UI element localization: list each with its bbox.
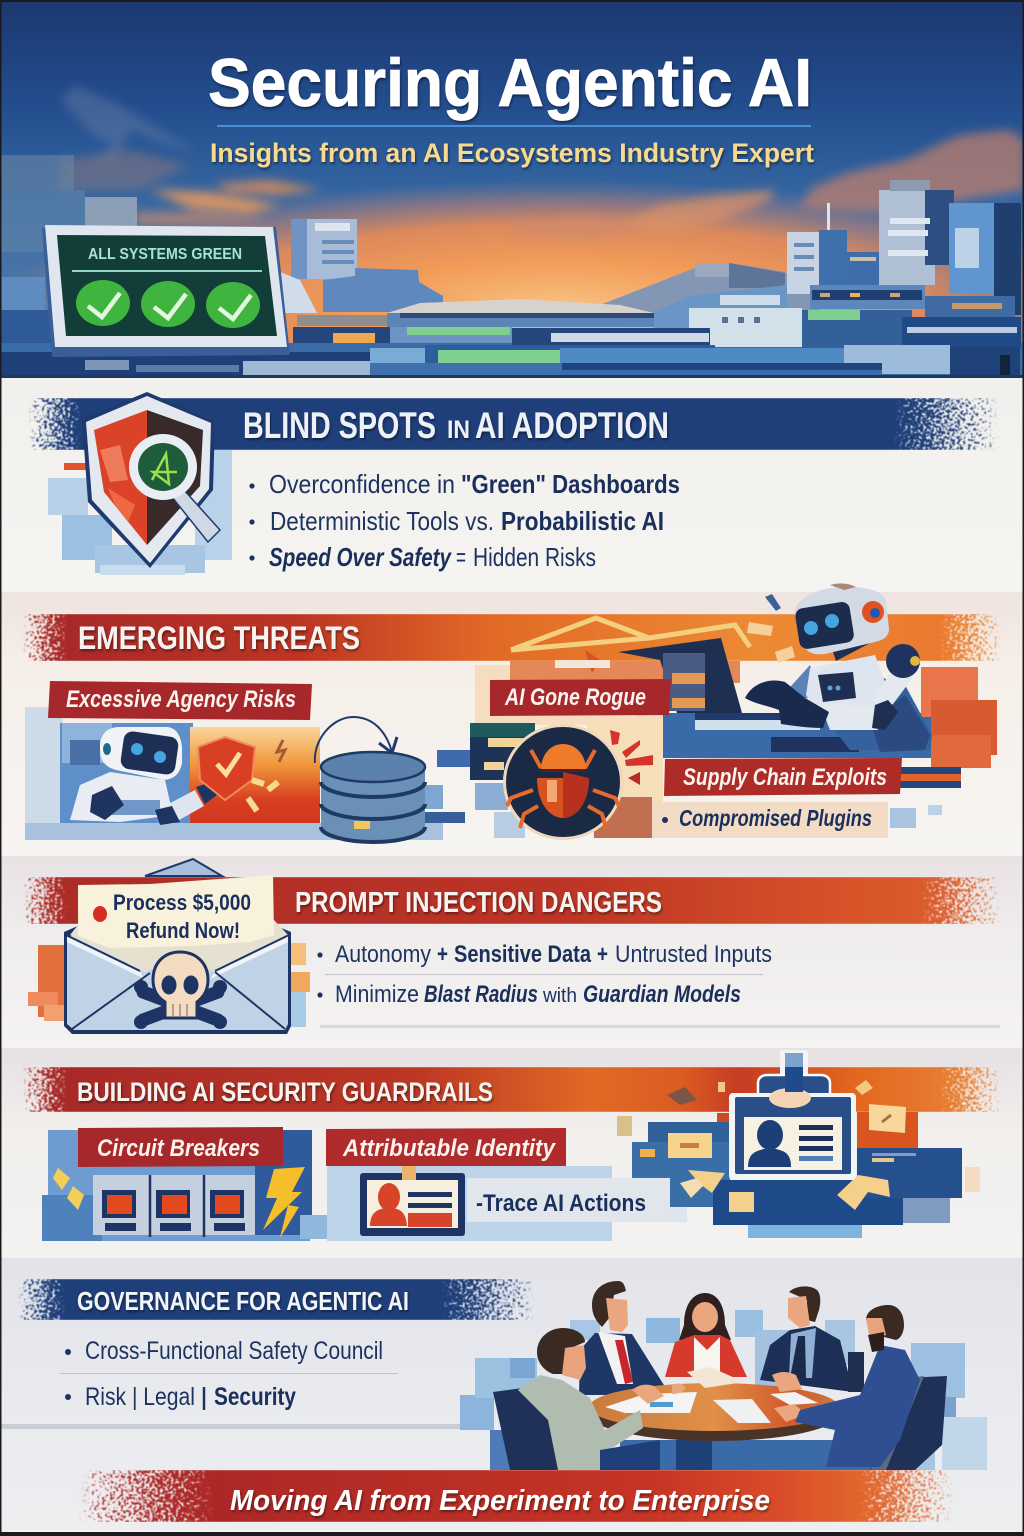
distant faded buildings [0, 155, 137, 355]
text: trace AI actions: -Trace AI Actions [476, 1190, 646, 1217]
man with red tie [579, 1281, 667, 1395]
blue mosaic backdrop [460, 1310, 987, 1470]
papers and book [605, 1367, 818, 1423]
bullet list: Untrusted Inputs [615, 941, 772, 968]
foreground city band [0, 285, 1024, 378]
label: attributable identity: Attributable Identity [342, 1135, 557, 1162]
bullet list [249, 469, 680, 572]
small shield [198, 737, 285, 811]
panel: building AI security guardrails [20, 1050, 1005, 1241]
illustration: robot at rogue workstation [511, 583, 932, 752]
hero panel: city skyline at sunset [0, 0, 1024, 430]
icon: skull and crossbones [134, 952, 227, 1029]
banner [20, 614, 1005, 661]
callout: compromised plugins [652, 802, 888, 838]
bullet list: Hidden Risks [473, 542, 596, 572]
heading: BLIND SPOTS [243, 405, 436, 446]
robot hands [745, 681, 829, 728]
icon: circuit breaker panel [53, 1167, 305, 1238]
bullet list: = [456, 542, 466, 572]
curved arrow [315, 717, 397, 763]
subtitle: Insights from an AI Ecosystems Industry Expert [210, 138, 814, 168]
panel: emerging threats [20, 583, 1005, 842]
robot head [100, 727, 182, 780]
label: excessive agency risks [48, 681, 312, 720]
heading: IN [447, 416, 470, 444]
bullet list: "Green" Dashboards [461, 469, 680, 499]
man in dark suit [760, 1286, 864, 1392]
heading: EMERGING THREATS [78, 620, 360, 656]
section 4 background [0, 1048, 1024, 1258]
bullet list: Minimize [335, 981, 419, 1008]
backdrop mosaics [42, 1112, 962, 1241]
bullet list: Guardian Models [583, 981, 741, 1008]
heading: AI ADOPTION [475, 405, 669, 446]
robot head [765, 583, 889, 654]
icon: status monitor [42, 225, 290, 357]
icon: shield with magnifier [48, 392, 232, 575]
bullet list: + [437, 941, 448, 968]
robot torso and arms [70, 772, 218, 825]
bullet list: Autonomy [335, 941, 431, 968]
heading: BUILDING AI SECURITY GUARDRAILS [77, 1077, 493, 1107]
title rule [217, 125, 811, 127]
bullet list: Speed Over Safety [269, 542, 452, 572]
bullet list: with [542, 985, 577, 1007]
bullet list: Sensitive Data [454, 941, 592, 968]
banner [20, 1067, 1005, 1112]
section 3 background [0, 856, 1024, 1048]
icon: lightning bolts [53, 1167, 305, 1238]
banner [25, 398, 1005, 450]
callout: compromised plugins: Compromised Plugins [679, 805, 872, 831]
bullet list: Overconfidence in [269, 469, 455, 499]
banner [15, 1279, 540, 1320]
footer banner [70, 1470, 960, 1522]
bullet list: | [200, 1383, 208, 1411]
right towers [787, 180, 1021, 315]
backdrop mosaics [25, 661, 997, 840]
illustration: team around a table [460, 1281, 987, 1470]
heading: GOVERNANCE FOR AGENTIC AI [77, 1286, 409, 1316]
letter text: Process $5,000 [113, 890, 251, 915]
bullet list [60, 1337, 398, 1411]
bullet list: Cross-Functional Safety Council [85, 1337, 383, 1365]
label: AI gone rogue [490, 679, 671, 716]
section 1 background [0, 378, 1024, 592]
heading: PROMPT INJECTION DANGERS [295, 887, 662, 919]
robot body [783, 644, 932, 752]
bullet list: Security [214, 1383, 296, 1411]
bullet list [317, 941, 772, 1008]
bullet list: Deterministic Tools vs. [270, 506, 494, 536]
section 5 background [0, 1258, 1024, 1530]
woman in red jacket [665, 1293, 747, 1377]
icon: ID badge with trace note [360, 1166, 670, 1236]
panel: blind spots in AI adoption [25, 392, 1005, 575]
monitor heading: ALL SYSTEMS GREEN [88, 246, 242, 263]
heading [243, 405, 669, 446]
panel: governance for agentic AI [0, 1279, 987, 1470]
green check indicators [76, 280, 260, 328]
section 2 background [0, 592, 1024, 856]
bullet list: Probabilistic AI [501, 506, 664, 536]
label: excessive agency risks: Excessive Agency Risks [66, 686, 296, 713]
label: circuit breakers [78, 1127, 283, 1167]
round table [589, 1383, 839, 1441]
bullet list: Risk | Legal [85, 1383, 195, 1411]
label: AI gone rogue: AI Gone Rogue [504, 684, 646, 711]
icon: envelope with skull and letter: Refund Now! [126, 918, 240, 943]
icon: bug in circle [503, 724, 653, 840]
icon: envelope with skull and letter [28, 859, 310, 1034]
icon: robot with shield and database [70, 717, 425, 842]
label: supply chain exploits: Supply Chain Exploits [683, 764, 887, 791]
database [321, 752, 425, 842]
center arena [293, 263, 820, 360]
robot neck [828, 627, 874, 661]
banner [20, 877, 1005, 924]
icon: red apple [93, 906, 107, 922]
hands [632, 1372, 806, 1422]
man seated back left [493, 1328, 660, 1470]
man seated right with beard [795, 1305, 947, 1470]
label: supply chain exploits [664, 758, 902, 796]
label: attributable identity [326, 1128, 566, 1166]
floating paper scraps [747, 622, 795, 663]
bullet list: Blast Radius [424, 981, 538, 1008]
illustration: large ID card with notes [617, 1050, 980, 1212]
bullet list: + [597, 941, 608, 968]
panel: prompt injection dangers [20, 859, 1005, 1034]
footer text: Moving AI from Experiment to Enterprise [230, 1485, 770, 1517]
title: Securing Agentic AI [208, 45, 812, 121]
label: circuit breakers: Circuit Breakers [97, 1135, 260, 1162]
left tower [280, 219, 443, 313]
